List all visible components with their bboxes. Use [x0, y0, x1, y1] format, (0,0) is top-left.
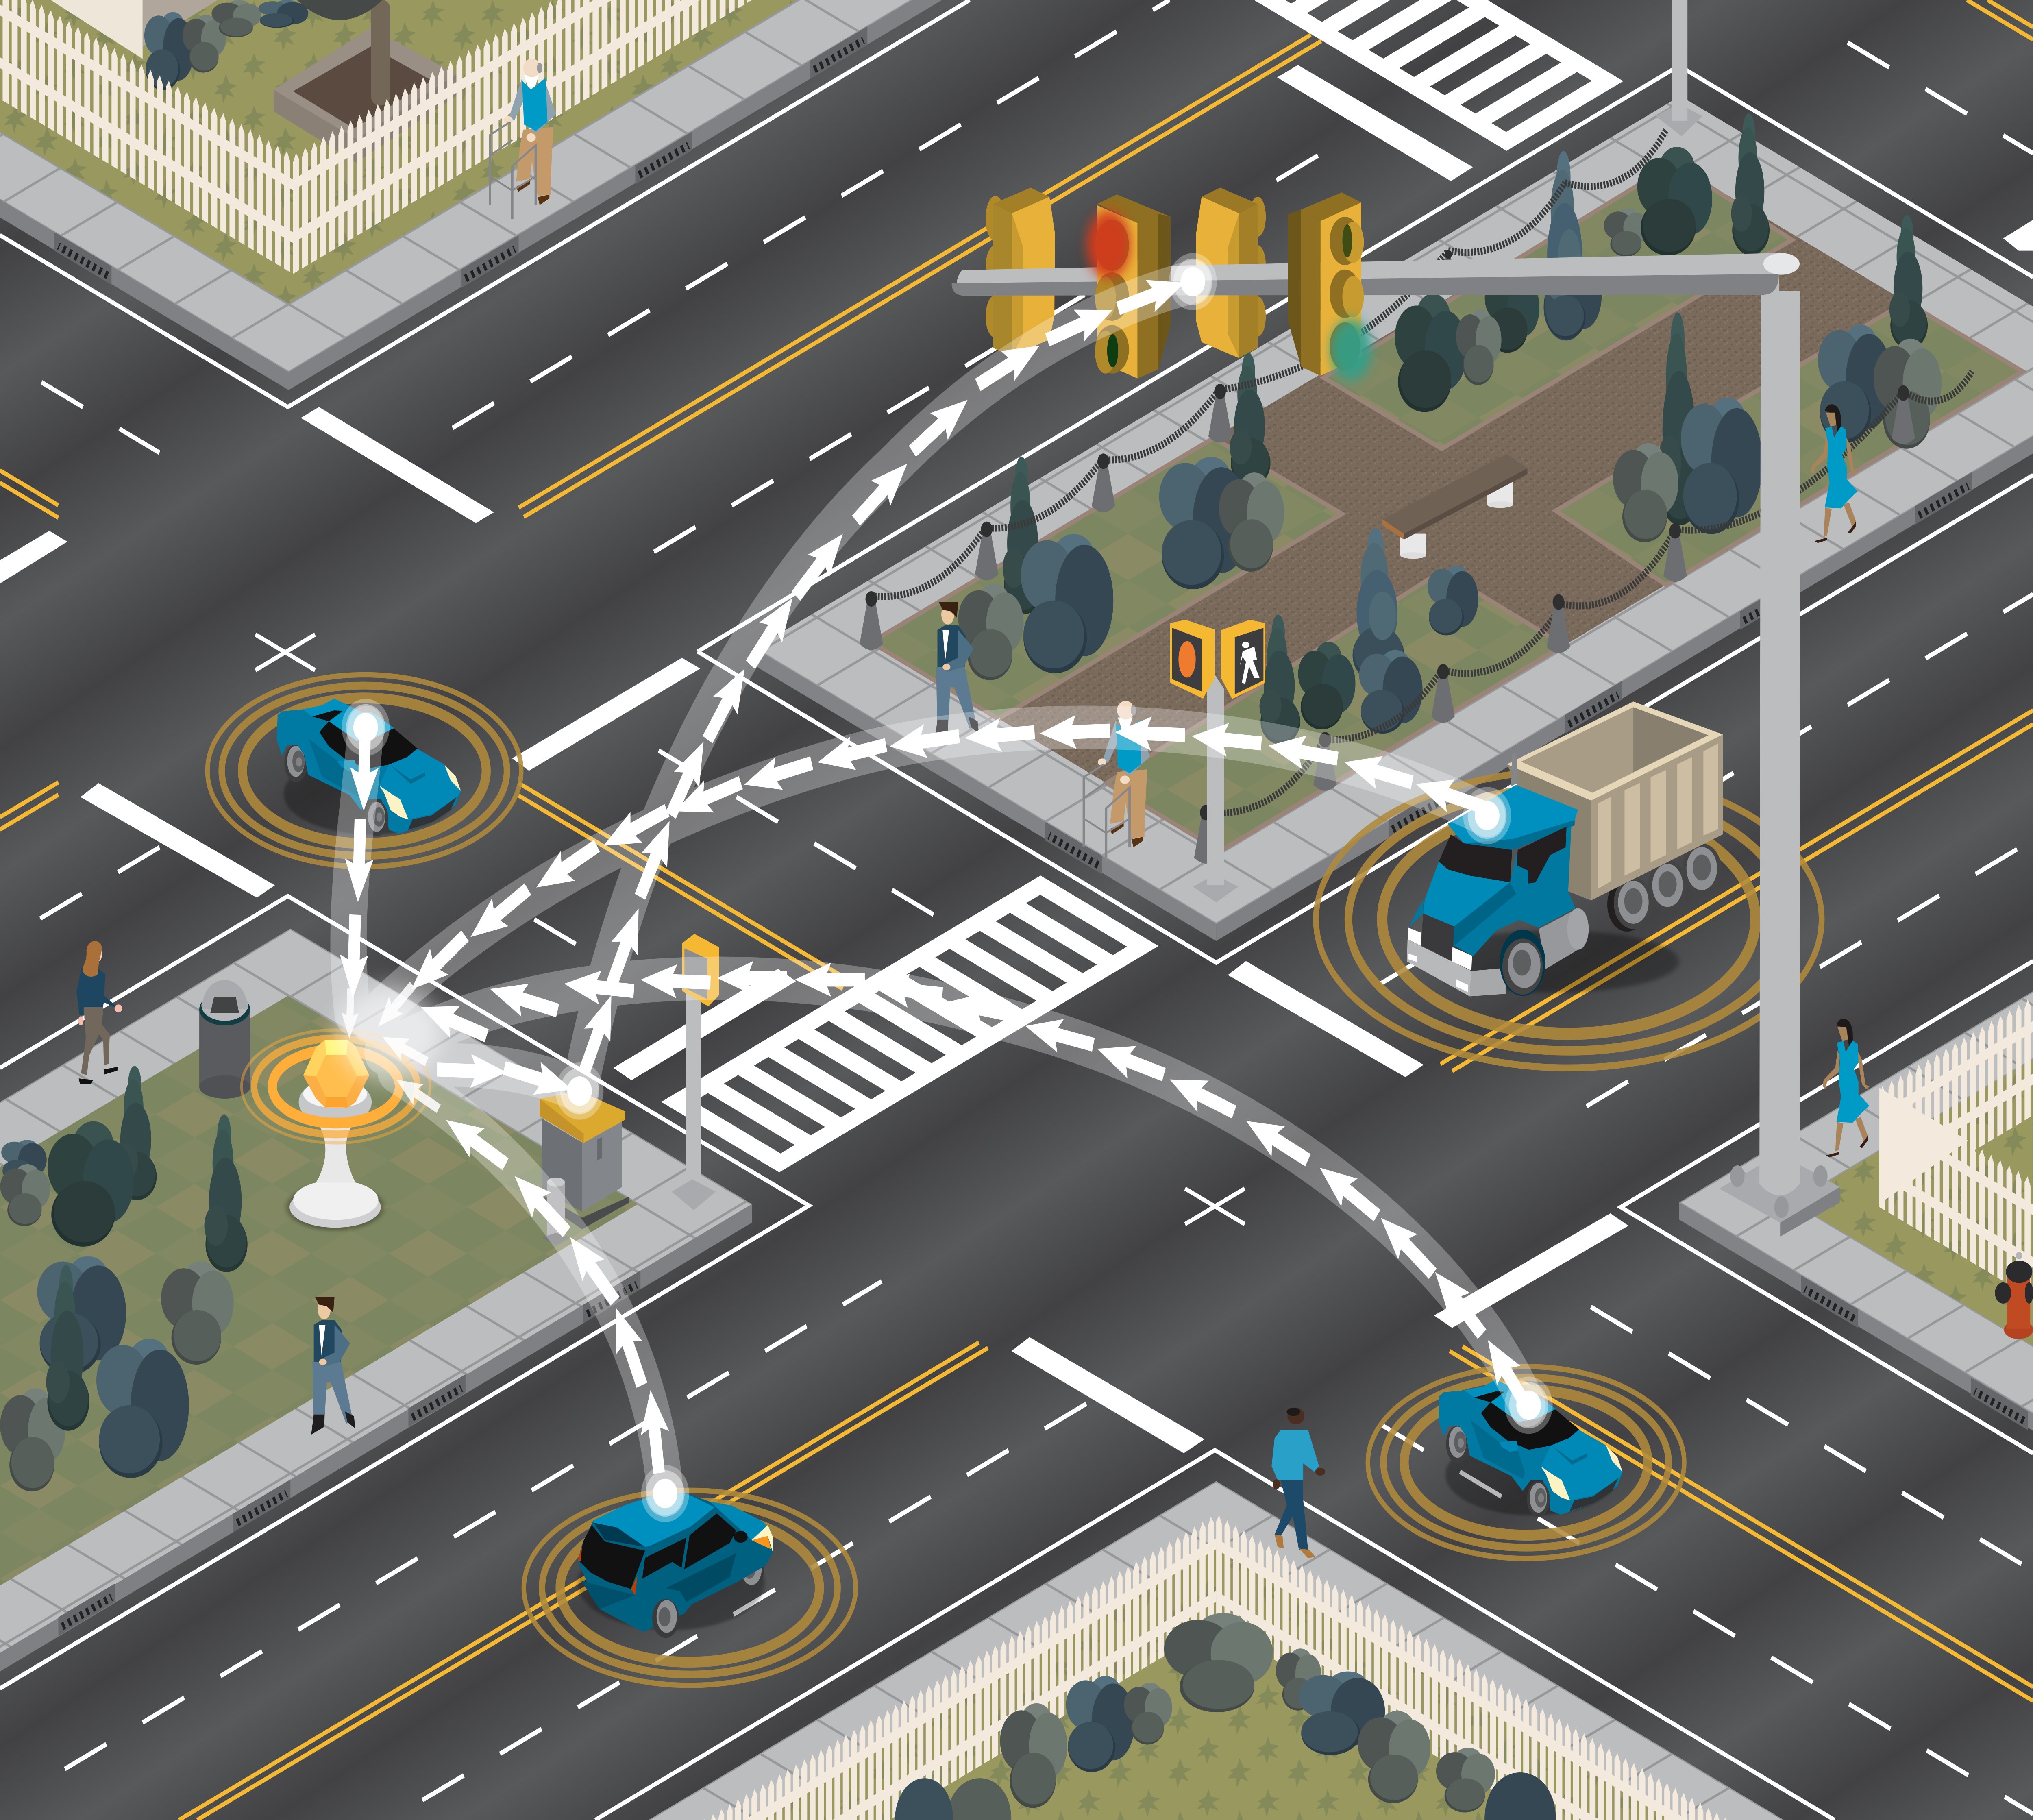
panel: lower-left lawn block: [0, 929, 752, 1672]
crosswalk: top: [1254, 0, 1623, 151]
beacon: hatchback: [641, 1465, 689, 1522]
arrows: hub to cabinet: [436, 1052, 576, 1106]
old man with walker: top: [490, 59, 556, 219]
beacon: top-left car: [342, 699, 390, 756]
panel: central park block: [755, 96, 2033, 941]
small signal post at crosswalk: [672, 934, 719, 1210]
shrubs: lower-left lawn: [0, 1066, 248, 1491]
sports car: top-left: [277, 699, 461, 836]
arrows: cabinet to traffic light: [571, 266, 1189, 1079]
signal rings: sports car, right: [1368, 1367, 1684, 1559]
woman in blue dress: upper: [1811, 404, 1858, 543]
shrubs: park: [958, 113, 1942, 745]
intersection centre crosses: [255, 635, 1245, 1224]
central data hub: pedestal and gem: [287, 1079, 384, 1230]
trash can: [199, 980, 250, 1099]
signal rings: sports car, top-left: [207, 675, 521, 866]
traffic controller cabinet: [533, 1092, 629, 1245]
beacon: truck: [1463, 787, 1511, 844]
crosswalk: centre: [661, 875, 1158, 1172]
light pole: top: [1656, 0, 1702, 136]
traffic signal heads behind mast arm: [986, 187, 1266, 358]
stop bars: [0, 65, 2033, 1453]
panel: top-left fenced block: [0, 0, 942, 390]
old man with walker: centre: [1084, 701, 1150, 862]
arrows: hatchback to hub: [391, 1069, 673, 1475]
woman in blue dress: lower: [1822, 1019, 1870, 1157]
man in jacket: park: [935, 602, 979, 740]
arrows: right sports car to hub: [378, 961, 1540, 1418]
sports car: right: [1439, 1380, 1623, 1517]
dump truck: [1407, 701, 1723, 997]
mast arm and pole: [952, 253, 1840, 1237]
beacon: right car: [1505, 1377, 1553, 1434]
icon: amber gem: [303, 1040, 369, 1108]
man in jacket: lower lawn: [311, 1297, 355, 1435]
traffic signal heads in front of mast arm: [1095, 192, 1364, 379]
arrows: truck to hub: [371, 714, 1487, 1035]
woman walking: brown hair: [76, 941, 122, 1084]
lawn patches: [871, 163, 2022, 851]
pedestrian signal with pole: [1170, 620, 1265, 902]
beacon: cabinet: [555, 1062, 603, 1120]
beacon: traffic light: [1169, 253, 1217, 310]
panel: bottom fenced block: [648, 1481, 1784, 1820]
chains and bollards: [860, 130, 1972, 864]
signal glow: green light: [1330, 319, 1372, 381]
signal rings: central hub: [242, 1030, 430, 1143]
hatchback car: [578, 1492, 773, 1638]
arrows: top-left car to hub: [338, 727, 379, 1039]
communication bands: [348, 282, 1527, 1493]
bench: [1382, 454, 1527, 559]
hub glow: [337, 987, 441, 1080]
icon: fire hydrant: [1995, 1252, 2033, 1339]
man in blue sweater: [1271, 1408, 1325, 1558]
signal glow: red light: [1086, 211, 1131, 279]
signal rings: hatchback: [524, 1490, 856, 1685]
panel: right fenced block: [1679, 991, 2033, 1431]
signal rings: truck: [1316, 771, 1822, 1068]
